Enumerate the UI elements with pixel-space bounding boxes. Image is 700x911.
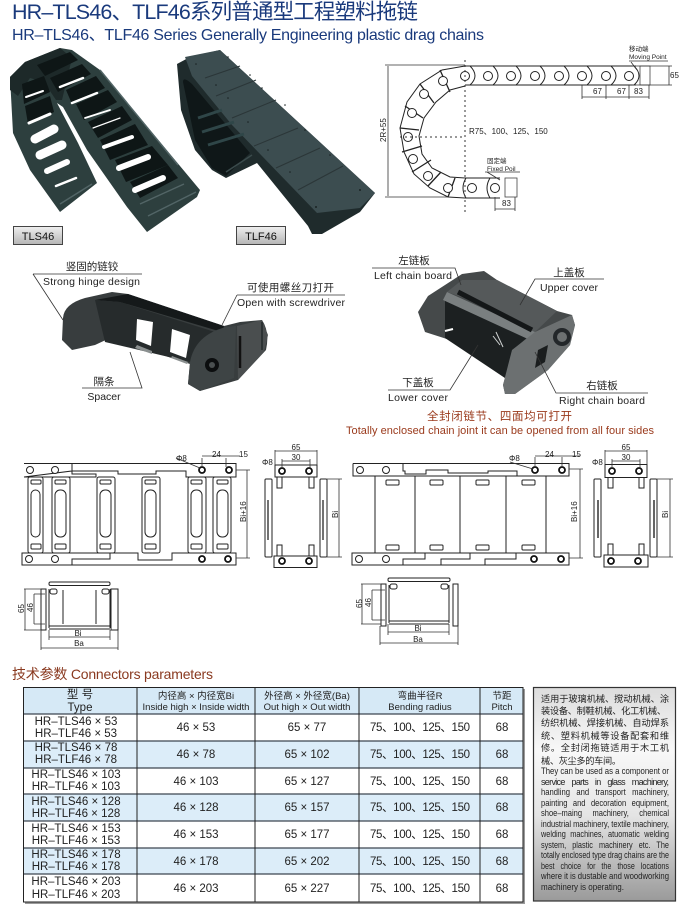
diagram: chain bending layout: 65 xyxy=(670,71,679,80)
label: TLS46: TLS46 xyxy=(22,231,54,243)
table row 153: HR–TLF46 × 153 xyxy=(32,835,120,847)
applications text English xyxy=(540,766,669,892)
table row 178: 46 × 178 xyxy=(173,856,219,868)
diagram: chain bending layout: 83 xyxy=(502,199,511,208)
table row 78: HR–TLF46 × 78 xyxy=(35,754,117,766)
technical drawing: TLF46 end view: 46 xyxy=(364,598,373,607)
diagram: chain bending layout: 67 xyxy=(617,87,626,96)
technical drawing: TLS46 end view: 46 xyxy=(26,603,35,612)
table row 178: HR–TLS46 × 178 xyxy=(31,849,121,861)
technical drawing: TLF46 end view: Bi xyxy=(414,624,422,633)
applications text Chinese: 纺织机械、焊接机械、自动焊系 xyxy=(541,717,669,728)
technical drawing: TLF46 side view: Bi xyxy=(661,511,670,518)
technical drawing: TLF46 side view xyxy=(592,443,673,567)
technical drawing: TLS46 plan view: Φ8 xyxy=(176,454,187,463)
technical drawing: TLS46 end view xyxy=(17,582,118,650)
label: upper cover xyxy=(520,266,604,305)
table: connector parameters xyxy=(23,687,525,904)
table header: 弯曲半径R xyxy=(398,690,443,702)
table header: 内径高 × 内径宽Bi xyxy=(158,690,234,702)
title: English heading: HR–TLS46、TLF46 Series Generally Engineering plastic drag chains xyxy=(12,27,484,44)
diagram: chain bending layout: 2R+55 xyxy=(379,118,388,142)
label: open with screwdriver: 可使用螺丝刀打开 xyxy=(247,281,334,294)
table row 78: HR–TLS46 × 78 xyxy=(35,742,117,754)
diagram: chain bending layout: R75、100、125、150 xyxy=(469,127,548,136)
technical drawing: TLF46 plan view: Φ8 xyxy=(509,454,520,463)
technical drawing: TLF46 plan view: 24 xyxy=(545,450,554,459)
technical drawing: TLS46 end view: Bi xyxy=(74,629,82,638)
table header: Inside high × Inside width xyxy=(143,702,249,713)
table row 103: HR–TLF46 × 103 xyxy=(32,781,120,793)
applications text Chinese: 装设备、制鞋机械、化工机械、 xyxy=(541,705,666,716)
table row 153: 46 × 153 xyxy=(173,829,219,841)
table row 53: HR–TLS46 × 53 xyxy=(35,716,117,728)
caption: enclosed chain joint: 全封闭链节、四面均可打开 xyxy=(427,409,572,423)
table row 203: 68 xyxy=(496,883,508,895)
table header: Out high × Out width xyxy=(264,702,350,713)
table row 128: 75、100、125、150 xyxy=(370,802,470,814)
applications text English: system, plastic machinery etc. The xyxy=(541,840,669,850)
label: TLS46 xyxy=(14,226,62,244)
applications text English: painting and decoration equipment, xyxy=(541,798,669,808)
table row 153: 65 × 177 xyxy=(284,829,330,841)
technical drawing: TLS46 side view: Bi xyxy=(331,511,340,518)
diagram: chain bending layout: Moving Point xyxy=(629,54,667,61)
technical drawing: TLF46 plan view: 15 xyxy=(572,450,581,459)
table row 78 xyxy=(35,742,508,766)
technical drawing: TLS46 side view: 30 xyxy=(292,453,301,462)
table header: 节距 xyxy=(492,691,512,702)
photo: TLF46 enclosed chain xyxy=(177,50,375,234)
label: spacer xyxy=(82,352,142,403)
applications text English: handling and transport machinery, xyxy=(541,787,669,797)
table row 128 xyxy=(31,796,508,820)
applications text Chinese: 修。全封闭拖链适用于木工机 xyxy=(541,742,669,753)
table row 153: HR–TLS46 × 153 xyxy=(31,823,121,835)
table row 153 xyxy=(31,823,508,847)
label: lower cover xyxy=(388,345,478,404)
technical drawing: TLF46 plan view: Bi+16 xyxy=(570,501,579,522)
applications text English: shoe–maing machinery, chemical xyxy=(541,808,669,818)
table row 178: 75、100、125、150 xyxy=(370,856,470,868)
table row 128: HR–TLF46 × 128 xyxy=(32,808,120,820)
table header: 型 号 xyxy=(67,687,93,701)
applications text English: totally enclosed type drag chains are the xyxy=(541,850,669,860)
technical drawing: TLS46 end view: Ba xyxy=(74,639,84,648)
label: upper cover: 上盖板 xyxy=(553,266,585,279)
table row 53: 46 × 53 xyxy=(177,722,215,734)
applications text English: industrial machinery, textile machinery, xyxy=(541,819,669,829)
applications text English: best choice for the those locations xyxy=(541,861,669,871)
table header: Bending radius xyxy=(388,702,452,713)
table row 53: 75、100、125、150 xyxy=(370,722,470,734)
table row 178: 65 × 202 xyxy=(284,856,330,868)
table row 203: 65 × 227 xyxy=(284,883,330,895)
applications text Chinese: 统、塑料机械等设备配套和维 xyxy=(541,730,669,741)
table header: 外径高 × 外径宽(Ba) xyxy=(264,690,350,702)
table row 203 xyxy=(31,876,508,901)
label: lower cover: Lower cover xyxy=(388,392,448,404)
applications text Chinese: 适用于玻璃机械、搅动机械、涂 xyxy=(541,693,669,704)
table row 103: 75、100、125、150 xyxy=(370,776,470,788)
technical drawing: TLS46 plan view: Bi+16 xyxy=(239,501,248,522)
title: Chinese heading: HR–TLS46、TLF46系列普通型工程塑料拖链 xyxy=(12,0,418,24)
technical drawing: TLS46 end view: 65 xyxy=(17,604,26,613)
label: strong hinge design: Strong hinge design xyxy=(43,276,140,288)
heading: connectors parameters: 技术参数 Connectors parameters xyxy=(12,666,213,682)
table row 128: 68 xyxy=(496,802,508,814)
technical drawing: TLS46 plan view xyxy=(22,450,250,565)
technical drawing: TLF46 end view: Ba xyxy=(413,635,423,644)
technical drawing: TLF46 end view: 65 xyxy=(355,599,364,608)
technical drawing: TLF46 side view: 30 xyxy=(622,453,631,462)
table row 128: 65 × 157 xyxy=(284,802,330,814)
technical drawing: TLF46 side view: 65 xyxy=(622,443,631,452)
technical drawing: TLS46 side view: 65 xyxy=(292,443,301,452)
table row 103: 46 × 103 xyxy=(173,776,219,788)
label: right chain board: 右链板 xyxy=(586,379,618,392)
technical drawing: TLF46 side view: Φ8 xyxy=(592,458,603,467)
technical drawing: TLS46 side view: Φ8 xyxy=(262,458,273,467)
technical drawing: TLF46 plan view xyxy=(352,450,583,565)
applications text English: machinery is operating. xyxy=(541,882,624,892)
diagram: chain bending layout: 67 xyxy=(593,87,602,96)
caption: enclosed chain joint xyxy=(346,409,654,437)
table row 178: 68 xyxy=(496,856,508,868)
diagram: chain bending layout xyxy=(379,44,679,212)
label: spacer: Spacer xyxy=(87,391,121,403)
table row 128: HR–TLS46 × 128 xyxy=(31,796,121,808)
technical drawing: TLF46 end view xyxy=(355,578,458,645)
table row 178 xyxy=(31,849,508,873)
applications text English: They can be used as a component or xyxy=(541,766,669,776)
applications text Chinese xyxy=(541,693,669,766)
label: TLF46: TLF46 xyxy=(245,231,277,243)
technical drawing: TLS46 plan view: 15 xyxy=(239,450,248,459)
table row 103: HR–TLS46 × 103 xyxy=(31,769,121,781)
table row 153: 75、100、125、150 xyxy=(370,829,470,841)
table row 103: 65 × 127 xyxy=(284,776,330,788)
label: strong hinge design xyxy=(33,260,142,320)
table row 103: 68 xyxy=(496,776,508,788)
technical drawing: TLS46 plan view: 24 xyxy=(212,450,221,459)
table row 53: 65 × 77 xyxy=(288,722,326,734)
label: strong hinge design: 竖固的链铰 xyxy=(66,260,119,273)
table row 203: HR–TLS46 × 203 xyxy=(31,876,121,888)
table header xyxy=(67,687,513,714)
table row 53: HR–TLF46 × 53 xyxy=(35,728,117,740)
panel: applications xyxy=(534,688,676,901)
photo: enclosed chain link with labels xyxy=(372,254,648,407)
label: lower cover: 下盖板 xyxy=(402,376,434,389)
photo: open chain link with labels xyxy=(33,260,346,403)
table row 78: 46 × 78 xyxy=(177,749,215,761)
technical drawing: TLS46 side view xyxy=(262,443,342,568)
label: right chain board: Right chain board xyxy=(559,395,645,407)
label: left chain board: 左链板 xyxy=(398,254,430,267)
table header: Type xyxy=(68,702,92,714)
photo: TLS46 open chain xyxy=(10,48,200,232)
applications text English: welding machines, atuomatic welding xyxy=(540,829,669,839)
table row 178: HR–TLF46 × 178 xyxy=(32,861,120,873)
table row 203: 75、100、125、150 xyxy=(370,883,470,895)
table row 203: 46 × 203 xyxy=(173,883,219,895)
table row 78: 75、100、125、150 xyxy=(370,749,470,761)
table row 128: 46 × 128 xyxy=(173,802,219,814)
label: left chain board: Left chain board xyxy=(374,270,452,282)
table row 78: 65 × 102 xyxy=(284,749,330,761)
label: open with screwdriver xyxy=(222,281,346,325)
applications text English: where it is dustable and woodworking xyxy=(540,871,669,881)
table row 53: 68 xyxy=(496,722,508,734)
table header: Pitch xyxy=(491,702,513,713)
diagram: chain bending layout: 移动端 xyxy=(629,44,649,53)
caption: enclosed chain joint: Totally enclosed chain joint it can be opened from all four sides xyxy=(346,425,654,437)
label: upper cover: Upper cover xyxy=(540,282,598,294)
diagram: chain bending layout: 固定端 xyxy=(487,156,507,165)
label: right chain board xyxy=(535,352,648,407)
label: open with screwdriver: Open with screwdriver xyxy=(237,297,346,309)
table row 103 xyxy=(31,769,508,793)
table row 153: 68 xyxy=(496,829,508,841)
table row 53 xyxy=(35,716,508,740)
table row 78: 68 xyxy=(496,749,508,761)
table row 203: HR–TLF46 × 203 xyxy=(32,889,120,901)
label: spacer: 隔条 xyxy=(94,375,115,388)
applications text English: service parts in glass machinery, xyxy=(541,777,669,787)
label: TLF46 xyxy=(236,226,286,244)
applications text Chinese: 械、灰尘多的车间。 xyxy=(541,755,621,766)
diagram: chain bending layout: 83 xyxy=(634,87,643,96)
diagram: chain bending layout: Fixed Poil xyxy=(487,166,516,173)
label: left chain board xyxy=(372,254,461,285)
